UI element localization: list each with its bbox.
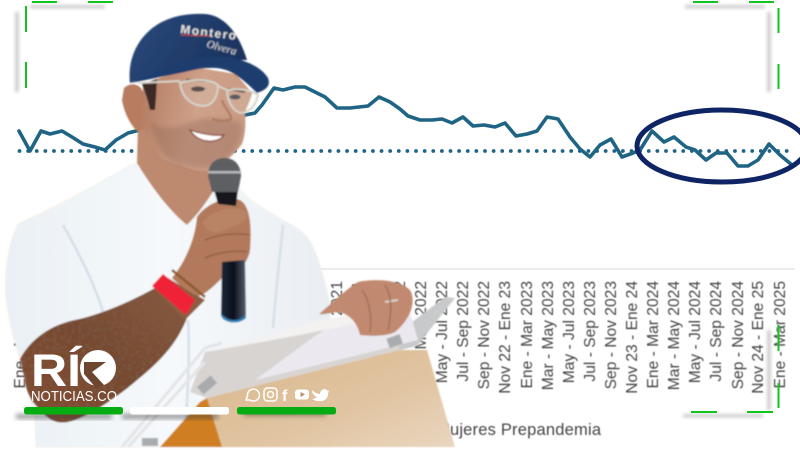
x axis labels: Nov 23 - Ene 24	[624, 281, 641, 394]
x axis labels: Ene - Mar 2023	[519, 281, 536, 388]
footer bar shadows	[16, 411, 326, 419]
x axis labels: Sep - Nov 2024	[730, 281, 747, 389]
lectern wood side	[160, 398, 222, 447]
legend label: Mujeres Prepandemia	[436, 421, 602, 439]
ear	[122, 84, 148, 132]
lectern bolts	[142, 334, 403, 446]
icon: instagram	[264, 388, 277, 401]
mic head	[208, 158, 241, 192]
x axis labels: Nov 22 - Ene 23	[497, 281, 514, 394]
x axis labels: Nov 24 - Ene 25	[750, 281, 767, 394]
right hand	[319, 280, 413, 336]
social icons	[246, 388, 329, 405]
icon: facebook: f	[282, 388, 288, 405]
chart	[12, 87, 800, 439]
nose shadow	[212, 100, 231, 121]
cap brim	[132, 57, 269, 93]
logo domain: NOTICIAS.CO	[31, 389, 117, 405]
x axis labels: Mar - May 2022	[413, 281, 430, 390]
highlight ellipse	[637, 110, 800, 182]
hand on mic	[172, 199, 251, 296]
bracelet	[152, 274, 195, 315]
x axis labels: Sep - Nov 2021	[350, 281, 367, 389]
wrist	[155, 278, 205, 320]
shirt fold shadows	[63, 225, 283, 420]
microphone	[203, 158, 249, 322]
x axis labels: Sep - Nov 2022	[476, 281, 493, 389]
x axis labels: Sep - Nov 2023	[603, 281, 620, 389]
acrylic edge	[122, 343, 222, 447]
x axis labels: Ene - Mar 2019	[12, 281, 29, 388]
neck	[137, 125, 232, 225]
fingers over mic	[203, 208, 247, 232]
cap logo: Montero	[180, 22, 237, 43]
top paper edge	[207, 313, 362, 352]
eyes	[191, 86, 205, 92]
cap crown	[130, 14, 247, 83]
x axis labels: Mar - May 2024	[666, 281, 683, 390]
x axis labels: Ene - Mar 2022	[392, 281, 409, 388]
speaker photo illustration	[6, 14, 455, 447]
x axis labels	[12, 281, 789, 394]
x axis labels: Jul - Sep 2024	[708, 281, 725, 382]
icon: youtube	[295, 390, 309, 400]
paper sheet	[255, 311, 418, 380]
lectern wood front	[207, 350, 455, 447]
logo wordmark: RÍ	[31, 345, 83, 396]
axis baseline	[320, 268, 795, 270]
acrylic lectern panel	[190, 326, 417, 398]
x axis labels: Ene - Mar 2024	[645, 281, 662, 388]
x axis labels: Jul - Sep 2021	[329, 281, 346, 382]
icon: whatsapp	[246, 389, 259, 401]
acrylic wing	[395, 297, 455, 350]
x axis labels: May - Jul 2023	[561, 281, 578, 383]
smile	[190, 130, 224, 141]
mic neck	[214, 190, 238, 206]
x axis labels: Mar - May 2023	[540, 281, 557, 390]
shirt	[6, 164, 330, 447]
data line	[19, 87, 792, 166]
forearm	[20, 285, 190, 423]
stubble shadow	[150, 118, 241, 168]
mic handle	[221, 260, 246, 321]
cap	[130, 14, 269, 93]
x axis labels: Jul - Sep 2023	[582, 281, 599, 382]
footer bars	[24, 407, 336, 414]
x axis labels: Nov 21 - Ene 22	[371, 281, 388, 394]
icon: twitter	[312, 389, 329, 401]
eyebrows	[186, 80, 245, 92]
reference dotted line	[20, 149, 795, 153]
x axis labels: May - Jul 2022	[434, 281, 451, 383]
x axis labels: Ene - Mar 2025	[772, 281, 789, 388]
x axis labels: Jul - Sep 2022	[455, 281, 472, 382]
hair	[142, 79, 157, 110]
logo circle	[80, 350, 116, 388]
cap: Olvera	[205, 38, 238, 58]
brand logo	[31, 345, 117, 405]
glasses	[138, 80, 258, 113]
face	[143, 68, 252, 171]
x axis labels: May - Jul 2024	[687, 281, 704, 383]
